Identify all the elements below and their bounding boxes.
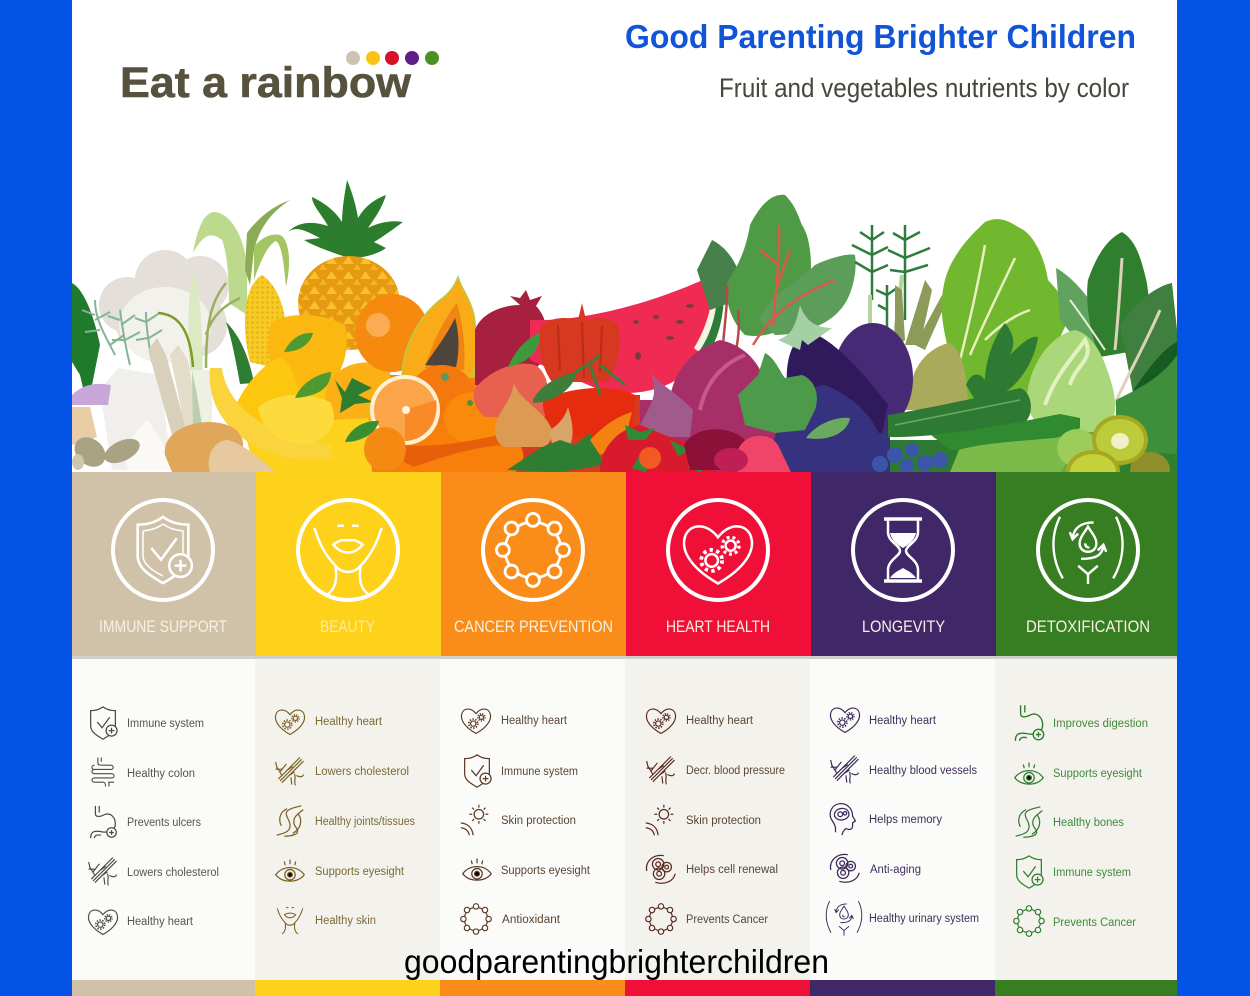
item labels: Decr. blood pressure [686,765,785,777]
item labels: Healthy bones [1053,817,1124,829]
item labels: Healthy skin [315,915,376,927]
icon: hourglass [853,500,953,600]
item labels [686,715,785,926]
item labels: Healthy heart [686,715,754,727]
bottom colour strip [72,980,1177,996]
title: Eat a rainbow logo [120,51,439,107]
berries and salad leaves [600,353,850,472]
item labels: Immune system [501,766,578,778]
label: CANCER PREVENTION [454,617,613,636]
green vegetables foreground [888,388,1177,494]
item labels: Lowers cholesterol [315,766,409,778]
illustration: fruit and vegetables arranged by colour [69,180,1177,494]
item labels: Anti-aging [870,864,921,876]
list items [461,709,491,934]
item labels: Supports eyesight [315,866,405,878]
panel: heart health benefits [625,659,810,980]
green chard leaves and dill [697,195,930,350]
item labels: Helps memory [869,814,942,826]
label: HEART HEALTH [666,617,770,636]
panel: longevity benefits [810,659,995,980]
item labels: Prevents Cancer [686,914,768,926]
panel: longevity header [811,472,996,656]
label: BEAUTY [320,617,375,636]
panel: immune support benefits [72,659,255,980]
item labels: Healthy urinary system [869,913,979,925]
icon: body with droplet [1038,500,1138,600]
light green bok choy and dark greens [895,219,1177,472]
item labels: Healthy heart [869,715,937,727]
panel: heart health header [626,472,811,656]
logo colour dots [346,51,439,65]
orange fruit group [345,277,523,472]
item labels: Healthy joints/tissues [315,816,415,828]
item labels: Immune system [1053,867,1131,879]
colour base fill behind produce [250,375,1177,472]
item labels [869,715,979,925]
item labels [501,715,591,926]
item labels: Healthy colon [127,768,195,780]
panel: cancer prevention benefits [440,659,625,980]
white vegetables group [69,200,290,473]
label: DETOXIFICATION [1026,617,1150,636]
item labels: Prevents ulcers [127,817,201,829]
purple vegetables group [640,305,948,473]
item labels: Healthy blood vessels [869,765,977,777]
item labels: Skin protection [501,815,576,827]
list items [826,708,862,936]
item labels: Improves digestion [1053,718,1148,730]
list items [646,709,676,934]
list items [88,707,118,934]
label: LONGEVITY [862,617,945,636]
site heading: Good Parenting Brighter Children [625,18,1136,55]
item labels [1053,718,1148,929]
label: IMMUNE SUPPORT [99,617,227,636]
panel: detoxification benefits [995,659,1177,980]
shadow under header tiles [72,656,1177,659]
subtitle: Fruit and vegetables nutrients by color [719,73,1129,103]
red fruit group [473,272,724,472]
list items [275,710,305,934]
list items [1014,705,1044,936]
item labels [315,716,415,927]
item labels: Supports eyesight [501,865,591,877]
item labels: Antioxidant [502,914,561,926]
panel: beauty benefits [255,659,440,980]
logo wordmark: Eat a rainbow [120,59,412,107]
item labels: Healthy heart [501,715,568,727]
panel: immune support header [72,472,256,656]
icon: heart with gears [668,500,768,600]
item labels: Healthy heart [127,916,194,928]
icon: shield [113,500,213,600]
item labels: Supports eyesight [1053,768,1143,780]
panel: cancer prevention header [441,472,626,656]
item labels: Lowers cholesterol [127,867,219,879]
icon: face [298,500,398,600]
item labels: Skin protection [686,815,761,827]
panel: beauty header [256,472,441,656]
item labels: Immune system [127,718,204,730]
watermark caption: goodparentingbrighterchildren [404,943,829,980]
item labels [127,718,219,928]
item labels: Helps cell renewal [686,864,778,876]
panel: detoxification header [996,472,1177,656]
yellow fruit group [165,180,403,472]
icon: cell ring [483,500,583,600]
item labels: Prevents Cancer [1053,917,1136,929]
item labels: Healthy heart [315,716,383,728]
